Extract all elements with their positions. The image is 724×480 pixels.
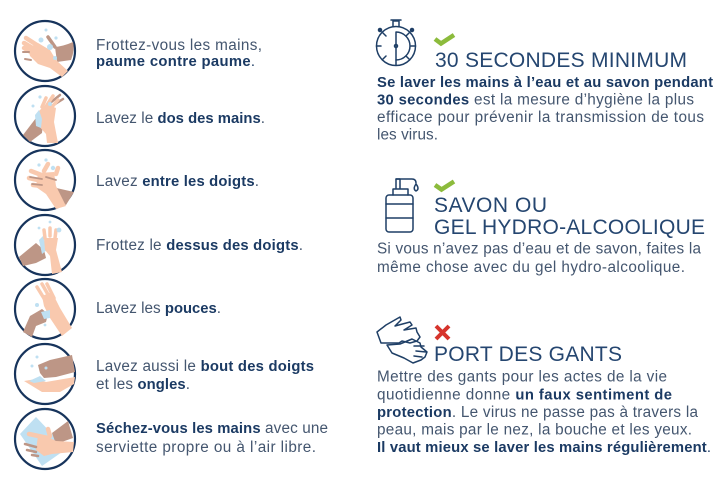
- text: 30 seconds body: les virus.: [377, 126, 438, 144]
- icon: step 7 drying with towel: [15, 409, 75, 469]
- step 7 text: [96, 420, 328, 456]
- text: 30 seconds body: efficace pour prévenir la transmission de tous: [377, 109, 704, 126]
- step 6 text: Lavez aussi le bout des doigts: [96, 358, 314, 375]
- heading: savon ou gel hydro-alcoolique: SAVON OU: [434, 194, 547, 217]
- heading: 30 secondes minimum: 30 SECONDES MINIMUM: [435, 49, 687, 72]
- step 1 text: paume contre paume.: [96, 54, 255, 70]
- step 3 text: Lavez entre les doigts.: [96, 173, 259, 190]
- icon: soap pump bottle: [386, 179, 418, 232]
- heading: savon ou gel hydro-alcoolique: [434, 194, 705, 239]
- text: gel body: même chose avec du gel hydro-alcoolique.: [377, 259, 685, 276]
- text: 30 seconds body: Se laver les mains à l’eau et au savon pendant: [377, 75, 713, 91]
- step 1 text: [96, 37, 262, 70]
- icon: step 3 between fingers: [15, 150, 75, 210]
- icon: step 2 back of hands: [15, 86, 75, 146]
- step 6 text: et les ongles.: [96, 376, 190, 393]
- heading: savon ou gel hydro-alcoolique: GEL HYDRO-ALCOOLIQUE: [434, 216, 705, 239]
- step 2 text: Lavez le dos des mains.: [96, 110, 265, 127]
- step 1 text: Frottez-vous les mains,: [96, 37, 262, 54]
- text: 30 seconds body: 30 secondes est la mesure d’hygiène la plus: [377, 92, 694, 108]
- icon: green check 1: [435, 35, 454, 44]
- icon: step 4 top of fingers: [15, 215, 75, 275]
- heading: port des gants: PORT DES GANTS: [434, 343, 622, 366]
- text: gloves body: Il vaut mieux se laver les mains régulièrement.: [377, 440, 711, 456]
- icon: step 5 thumbs: [15, 279, 75, 339]
- text: gloves body: [377, 368, 711, 456]
- step 5 text: Lavez les pouces.: [96, 300, 221, 317]
- icon: step 6 fingertips and nails: [15, 344, 75, 404]
- text: gloves body: quotidienne donne un faux sentiment de: [377, 386, 672, 404]
- step 6 text: [96, 358, 314, 393]
- icon: stopwatch: [376, 20, 416, 66]
- text: gloves body: protection. Le virus ne passe pas à travers la: [377, 404, 698, 421]
- text: gloves body: peau, mais par le nez, la bouche et les yeux.: [377, 422, 692, 438]
- text: gel body: Si vous n’avez pas d’eau et de savon, faites la: [377, 240, 701, 258]
- icon: step 1 palm against palm: [15, 21, 75, 81]
- icon: green check 2: [435, 182, 454, 190]
- icon: gloves: [377, 317, 427, 363]
- step 4 text: Frottez le dessus des doigts.: [96, 237, 303, 254]
- text: gel body: [377, 240, 701, 276]
- text: gloves body: Mettre des gants pour les actes de la vie: [377, 368, 667, 386]
- step 7 text: serviette propre ou à l’air libre.: [96, 439, 316, 456]
- icon: red cross: [436, 326, 449, 339]
- step 7 text: Séchez-vous les mains avec une: [96, 420, 328, 437]
- text: 30 seconds body: [377, 75, 713, 144]
